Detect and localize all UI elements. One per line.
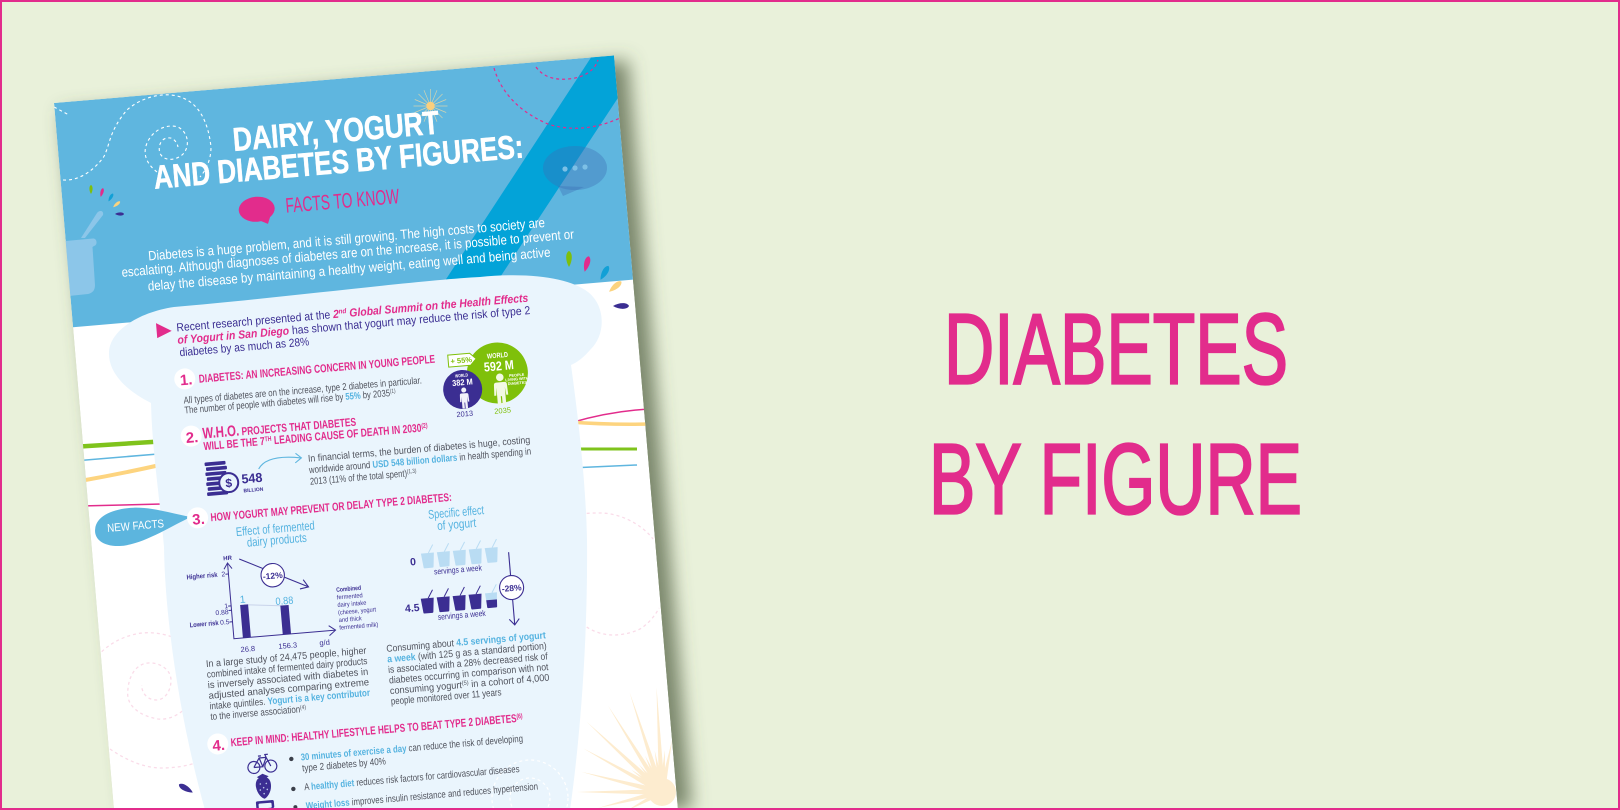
left column text: intake quintiles. Yogurt is a key contributor — [209, 688, 371, 712]
row: 4.5 servings: servings a week — [437, 608, 487, 622]
2035 green circle: LIVING WITH — [505, 376, 529, 382]
left column title: dairy products — [246, 531, 307, 550]
legend: combined dairy intake: fermented — [337, 592, 364, 601]
icon: speech bubble, translucent — [543, 146, 607, 196]
title: Diabetes by figure — [929, 294, 1302, 536]
title: AND DIABETES BY FIGURES: — [152, 128, 525, 196]
list item: exercise — [289, 734, 524, 775]
section 1 heading — [174, 354, 435, 390]
legend: combined dairy intake: fermented milk) — [339, 621, 379, 632]
decorative pink dashed arcs — [494, 60, 620, 128]
bars — [240, 604, 251, 638]
icon: yogurt pot with spoon — [66, 211, 104, 296]
right column title: Specific effect — [428, 503, 485, 522]
axis labels — [184, 548, 330, 658]
2035 green circle: 592 M — [483, 357, 514, 375]
left column text: combined intake of fermented dairy products — [206, 656, 368, 681]
lead paragraph: diabetes by as much as 28% — [179, 335, 310, 359]
icon: sun — [414, 89, 448, 123]
2013 purple circle — [443, 370, 482, 418]
arrow: -12% — [239, 553, 309, 594]
row: 0 servings: 0 — [410, 556, 417, 569]
section 4 heading — [206, 708, 524, 755]
2035 green circle: DIABETES — [508, 380, 528, 386]
legend: combined dairy intake: Combined — [336, 585, 362, 594]
left column text: to the inverse association — [210, 703, 321, 723]
list item: healthy diet: A healthy diet reduces risk factors for cardiovascular diseases — [304, 764, 520, 793]
section 2 heading: (2) — [421, 423, 428, 430]
icon: coin stack 548 billion: $ — [225, 476, 233, 490]
left column text: In a large study of 24,475 people, higher — [206, 646, 368, 670]
axis labels: 0.5 — [220, 619, 230, 627]
panel: light blue yogurt-pot blob — [109, 275, 602, 810]
icon: coin stack 548 billion — [204, 460, 264, 496]
section 2 heading: LEADING CAUSE OF DEATH IN 2030 — [271, 423, 422, 447]
2013 purple circle: 2013 — [456, 409, 473, 419]
left column text — [206, 646, 372, 723]
arrow: coins to text — [258, 453, 302, 469]
icon: pink speech bubble — [238, 196, 275, 224]
section 1 heading: DIABETES: AN INCREASING CONCERN IN YOUNG PEOPLE — [198, 354, 436, 386]
icon: weighing scale — [256, 800, 274, 809]
list item: healthy diet — [291, 764, 520, 794]
intro text: delay the disease by maintaining a healthy weight, eating well and being active — [147, 245, 551, 294]
right column text: people monitored over 11 years — [390, 687, 502, 708]
decorative coloured bands — [80, 409, 650, 506]
section 2 text: (1,3) — [407, 469, 417, 475]
2035 green circle — [467, 342, 528, 414]
chart: fermented dairy hazard ratio: 0.88 — [275, 595, 294, 608]
lead paragraph: of Yogurt in San Diego has shown that yogurt may reduce the risk of type 2 — [177, 304, 531, 347]
2013 purple circle: WORLD — [455, 372, 469, 379]
section 2 heading: TH — [264, 436, 272, 443]
legend: combined dairy intake — [336, 584, 379, 632]
decorative pink dashed circles — [102, 513, 659, 768]
row: 0 servings: servings a week — [434, 562, 483, 577]
intro text: escalating. Although diagnoses of diabetes are on the increase, it is possible to prevent or — [121, 226, 575, 280]
callout: new facts — [95, 508, 188, 546]
icon: strawberry — [255, 773, 272, 799]
right column text: Consuming about 4.5 servings of yogurt — [386, 630, 547, 655]
+55% tag: + 55% — [450, 355, 473, 366]
chart: yogurt servings pictogram — [400, 537, 527, 634]
right column title: of yogurt — [437, 516, 477, 533]
arrow: -28%: -28% — [501, 582, 522, 594]
left column text: adjusted analyses comparing extreme — [208, 677, 370, 702]
legend: combined dairy intake: dairy intake — [337, 600, 367, 609]
section 1 text: (1) — [390, 389, 396, 395]
section 4 heading: 4. — [212, 737, 226, 755]
section 2 heading: 2. — [185, 429, 199, 447]
axis labels: Higher risk — [186, 572, 218, 581]
lead paragraph: Recent research presented at the 2 — [176, 307, 348, 334]
axes — [224, 562, 336, 640]
section 3 heading: 3. — [192, 511, 205, 529]
panel: blue header — [54, 55, 633, 327]
2035 green circle: PEOPLE — [509, 373, 525, 378]
axis labels: HR — [223, 556, 233, 562]
panel: infographic sheet — [54, 55, 678, 810]
section 1 text: All types of diabetes are on the increase, type 2 diabetes in particular. — [183, 375, 422, 407]
sheet shadow — [62, 60, 692, 810]
section 2 text: 2013 (11% of the total spent) — [310, 466, 435, 488]
title: Diabetes by figure: BY FIGURE — [929, 424, 1302, 536]
right column text: in a cohort of 4,000 — [468, 673, 550, 690]
lead paragraph: Global Summit on the Health Effects — [346, 292, 529, 320]
chart: fermented dairy hazard ratio — [186, 556, 378, 652]
section 2 text: worldwide around USD 548 billion dollars in health spending in — [308, 446, 532, 476]
section 2 heading: WILL BE THE 7 — [203, 434, 287, 453]
icon: large colour drops — [177, 251, 629, 810]
section 4 heading: (6) — [516, 713, 523, 721]
axis labels: g/d — [319, 638, 330, 647]
left column title: Effect of fermented — [235, 518, 315, 539]
right column text: consuming yogurt — [390, 680, 467, 697]
axis labels: 26.8 — [240, 644, 256, 654]
title — [155, 110, 522, 189]
axis labels: 2 — [221, 571, 226, 579]
row: 0 servings — [409, 539, 500, 578]
icon: coin stack 548 billion: 548 — [241, 470, 263, 486]
decorative white dashed swirl — [54, 95, 211, 180]
row: 4.5 servings — [404, 584, 499, 625]
section 1 text: The number of people with diabetes will rise by 55% by 2035 — [184, 387, 399, 417]
section 3 heading: HOW YOGURT MAY PREVENT OR DELAY TYPE 2 DIABETES: — [210, 492, 452, 524]
section 2 text — [307, 435, 533, 488]
section 1 text — [184, 377, 422, 414]
legend: combined dairy intake: and thick — [338, 615, 363, 624]
icon: small colour drops — [89, 185, 124, 216]
bar values: 1 — [239, 594, 246, 606]
left column text: is inversely associated with diabetes in — [207, 667, 369, 691]
axis labels: 0.88 — [215, 609, 229, 617]
section 2 heading — [180, 418, 428, 450]
row: 4.5 servings: 4.5 — [405, 602, 420, 615]
decorative white dashed circles — [492, 760, 568, 810]
callout: new facts: NEW FACTS — [107, 518, 165, 535]
chart: world diabetes circles — [443, 342, 528, 418]
axis labels: 156.3 — [278, 640, 297, 651]
left column title — [236, 520, 314, 548]
section 2 text: In financial terms, the burden of diabetes is huge, costing — [308, 435, 531, 465]
list item: exercise: 30 minutes of exercise a day can reduce the risk of developing — [300, 734, 523, 763]
list item: exercise: type 2 diabetes by 40% — [302, 756, 387, 774]
right column text: diabetes occurring in comparison with not — [389, 662, 549, 687]
decorative sunburst — [577, 687, 676, 810]
lead paragraph: nd — [338, 308, 347, 316]
axis labels: 1 — [224, 603, 229, 610]
intro text: Diabetes is a huge problem, and it is still growing. The high costs to society are — [148, 215, 545, 264]
2035 green circle: 2035 — [494, 405, 511, 416]
lead paragraph — [156, 294, 530, 356]
2035 green circle: WORLD — [487, 352, 508, 361]
title: DAIRY, YOGURT — [231, 104, 441, 158]
subtitle: facts to know: FACTS TO KNOW — [285, 185, 400, 218]
icon: bicycle — [247, 754, 277, 774]
legend: combined dairy intake: (cheese, yogurt — [338, 606, 377, 617]
section 4 heading: KEEP IN MIND: HEALTHY LIFESTYLE HELPS TO BEAT TYPE 2 DIABETES — [230, 703, 632, 749]
left column text: (4) — [300, 705, 306, 711]
right column text: (5) — [462, 680, 469, 687]
section 2 heading: W.H.O. PROJECTS THAT DIABETES — [202, 413, 357, 443]
right column text — [386, 630, 551, 708]
arrow: -12%: -12% — [262, 570, 283, 582]
right column text: a week (with 125 g as a standard portion) — [387, 641, 547, 665]
subtitle: facts to know — [238, 188, 398, 224]
title: Diabetes by figure: DIABETES — [944, 294, 1288, 406]
axis labels: Lower risk — [189, 620, 219, 629]
panel: sheet content — [95, 110, 574, 808]
2013 purple circle: 382 M — [452, 376, 473, 388]
icon: pink triangle — [156, 322, 172, 338]
right column title — [428, 506, 484, 532]
section 1 heading: 1. — [179, 371, 193, 389]
right column text: is associated with a 28% decreased risk of — [388, 651, 548, 676]
icon: coin stack 548 billion: BILLION — [243, 487, 264, 494]
section 3 heading — [187, 493, 452, 528]
